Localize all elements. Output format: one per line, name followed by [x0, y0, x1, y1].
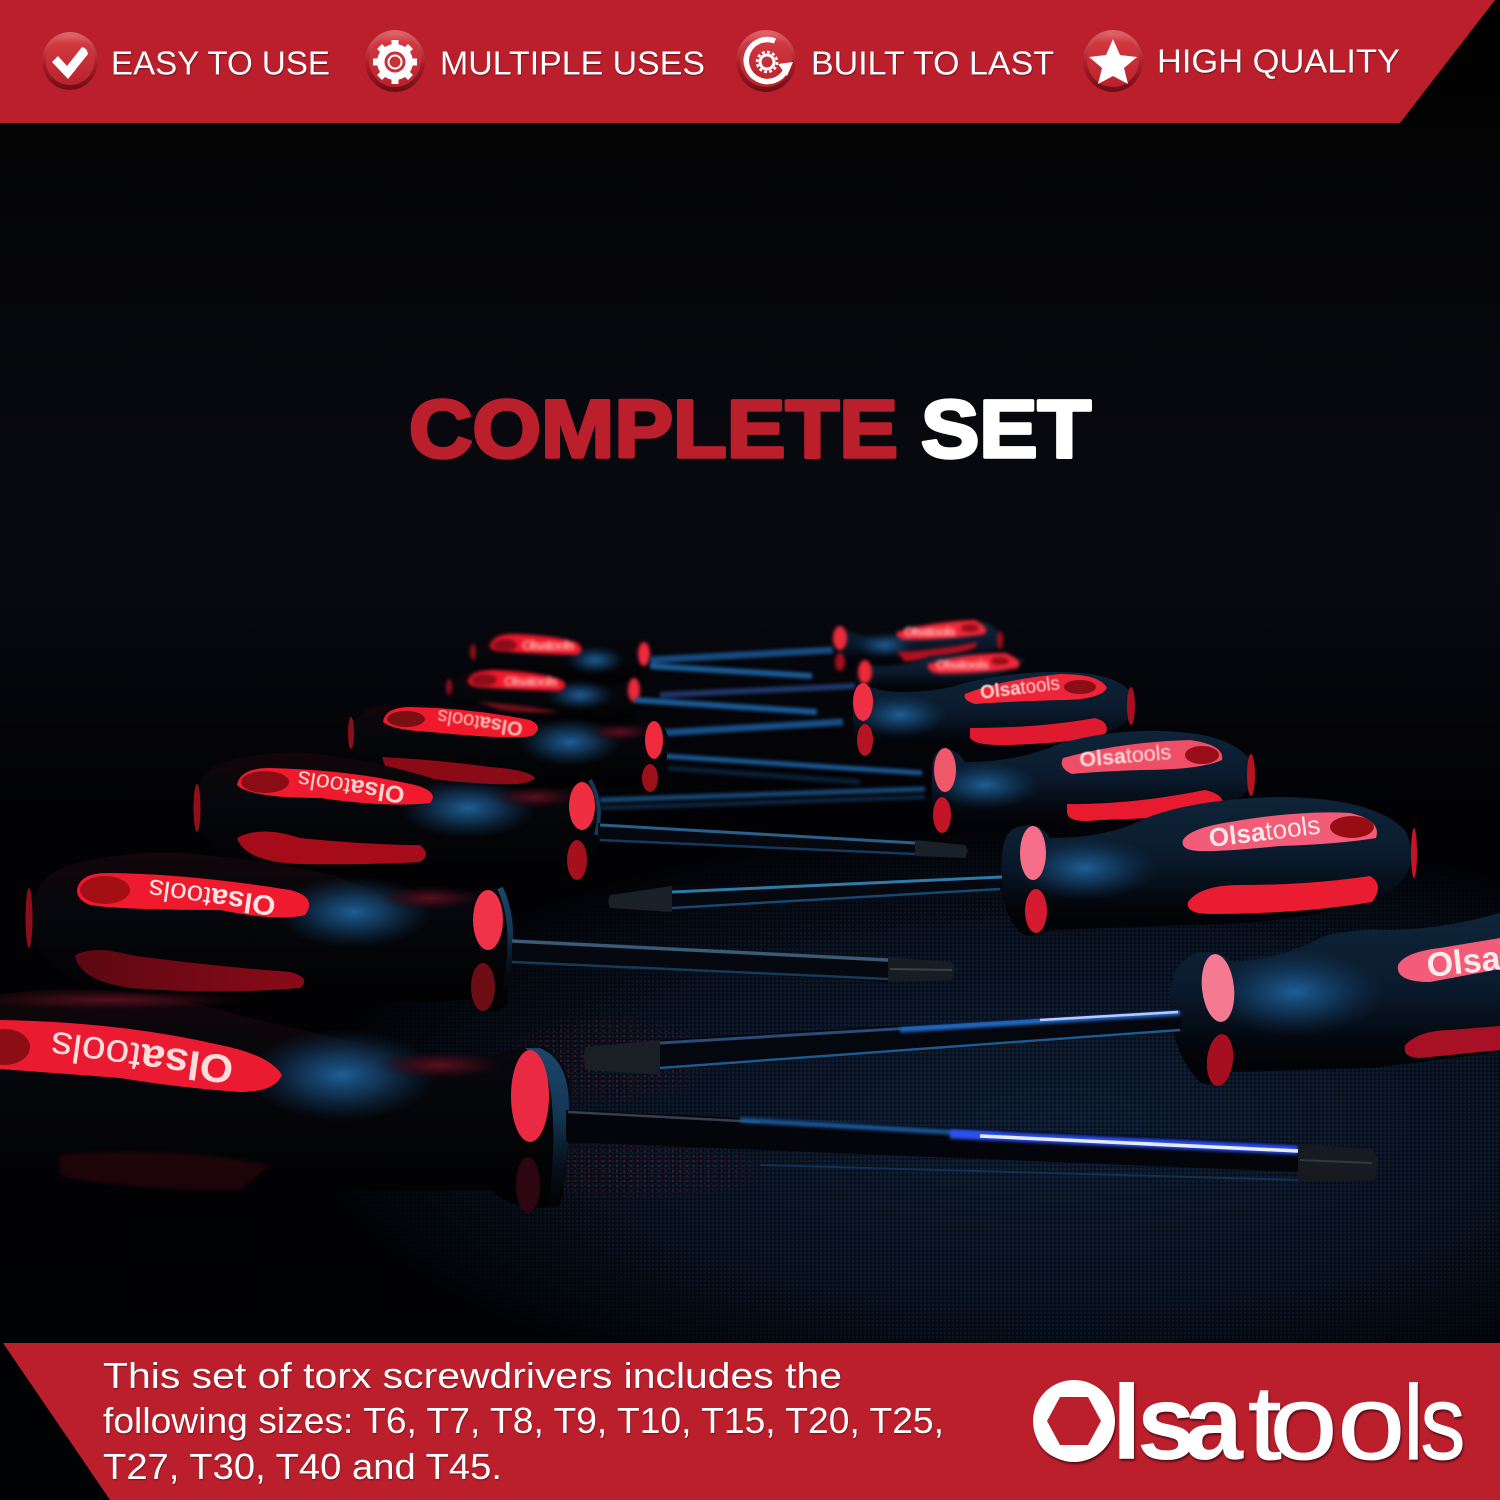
screwdriver: row 3 left: Olsatools: [436, 704, 524, 740]
logo: Olsatools: a: [1184, 1364, 1244, 1482]
feature: built to last: [736, 30, 1054, 92]
shaft: row 4 left: [598, 823, 968, 858]
label: built to last: BUILT TO LAST: [811, 44, 1054, 82]
logo: Olsatools: l: [1112, 1364, 1141, 1482]
screwdriver: row 4 right: Olsatools: [1078, 741, 1172, 772]
logo: Olsatools: [1030, 1363, 1465, 1482]
product photo: twelve screwdrivers: [0, 620, 1500, 1213]
description text: This set of torx screwdrivers includes the: [103, 1355, 842, 1396]
screwdriver: front left: Olsatools: [48, 1022, 236, 1092]
logo: Olsatools: O: [1030, 1364, 1112, 1482]
logo: Olsatools: s: [1137, 1364, 1196, 1482]
screwdriver: row 5 right: [1001, 797, 1417, 936]
heading: complete set: [409, 384, 1091, 475]
feature: easy to use: [42, 32, 330, 90]
bottom banner: [3, 1343, 1500, 1500]
label: easy to use: EASY TO USE: [111, 44, 330, 82]
feature: high quality: [1083, 30, 1400, 92]
screwdriver: row 5 right: Olsatools: [1207, 810, 1322, 853]
description text: [103, 1355, 944, 1487]
icon: check mark: [52, 47, 88, 79]
screwdriver: second row left: Olsatools: [504, 673, 558, 689]
shaft: front right: [583, 1008, 1182, 1075]
screwdriver: row 4 left: [194, 752, 600, 882]
icon: gear: [373, 40, 417, 84]
screwdriver: row 6 left: [26, 852, 514, 1011]
logo: Olsatools: l: [1403, 1363, 1423, 1482]
icon: star: [1089, 39, 1137, 84]
screwdriver: row 6 left: Olsatools: [146, 873, 277, 922]
background photo: dark studio backdrop: [0, 235, 1500, 1343]
shaft: row 5 right: [608, 875, 1002, 912]
logo: Olsatools: s: [1420, 1363, 1465, 1482]
heading: complete set: SET: [921, 384, 1091, 475]
screwdriver: row 3 right: Olsatools: [979, 673, 1061, 704]
screwdriver: row 3 left: [348, 704, 668, 792]
heading: complete set: COMPLETE: [409, 384, 898, 475]
screwdriver: row 3 right: [852, 672, 1135, 759]
screwdriver: row 4 right: [930, 731, 1255, 835]
screwdriver: far left back row: Olsatools: [522, 637, 575, 653]
shaft: row 6 left: [512, 940, 955, 982]
label: high quality: HIGH QUALITY: [1157, 42, 1400, 80]
screwdriver: front right: [1170, 913, 1500, 1087]
label: multiple uses: MULTIPLE USES: [440, 44, 705, 82]
logo: Olsatools: o: [1337, 1364, 1405, 1482]
top banner: [0, 0, 1495, 123]
logo: Olsatools: o: [1270, 1364, 1337, 1482]
screwdriver: second row left: [446, 670, 642, 723]
screwdriver: second row right: [856, 653, 1025, 694]
description text: following sizes: T6, T7, T8, T9, T10, T15, T20, T25,: [103, 1400, 944, 1441]
shaft: front left: [566, 1110, 1378, 1182]
icon: circular arrow with gear: [746, 40, 793, 82]
feature: multiple uses: [365, 30, 705, 92]
screwdriver: far right back row: Olsatools: [904, 624, 956, 639]
screwdriver: far left back row: [470, 634, 650, 682]
logo: Olsatools: t: [1248, 1364, 1282, 1482]
screwdriver: front left: [0, 990, 570, 1213]
description text: T27, T30, T40 and T45.: [103, 1446, 502, 1487]
shaft group: back rows: [600, 650, 925, 808]
screwdriver: second row right: Olsatools: [936, 657, 989, 672]
screwdriver: far right back row: [833, 620, 1003, 671]
screwdriver: row 4 left: Olsatools: [296, 765, 407, 808]
